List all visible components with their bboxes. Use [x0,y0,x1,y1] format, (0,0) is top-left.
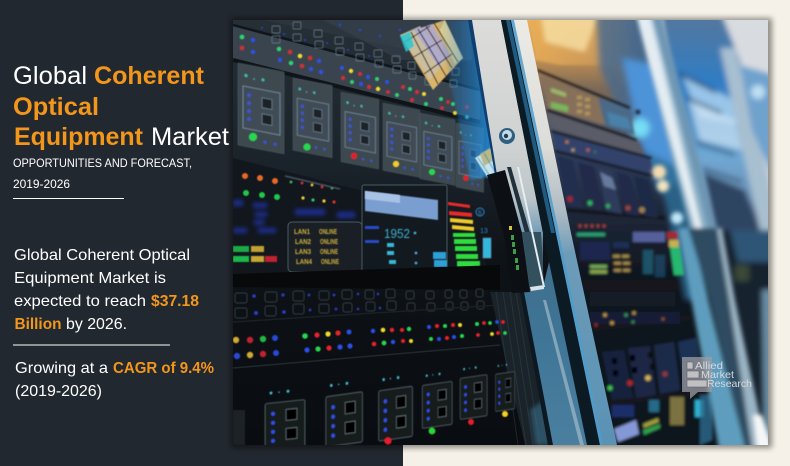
LAN status panel: LAN4 [296,259,312,266]
market size text: Global Coherent Optical [14,247,190,264]
market size text: by 2026. [66,316,127,333]
middle control zone [233,158,491,278]
CAGR text [15,360,214,400]
title [13,62,229,151]
market size text: $37.18 [151,293,199,310]
level meter bars: 6 [478,210,482,217]
logo: Allied Market Research [682,357,752,399]
LCD display: 1952 [384,226,410,241]
icon: door screw [499,128,515,144]
LCD display [362,185,447,273]
title: Market [151,123,229,151]
CAGR text: CAGR of 9.4% [113,360,214,377]
blue glow beside door [438,20,499,180]
market size text: expected to reach [14,293,146,310]
LAN status panel: LAN2 [295,239,311,246]
LAN status panel [288,222,362,272]
level meter bars [448,202,491,267]
photo: server racks [233,10,780,455]
market size text [14,247,199,333]
lower dark rows [233,265,500,368]
LAN status panel: LAN1 [294,229,310,236]
photo shadow [231,18,772,448]
CAGR text: Growing at a [15,360,108,377]
logo: Allied Market Research: Market [701,369,734,381]
market size text: Equipment Market is [14,270,166,287]
small glass reflection [475,148,498,178]
logo: Allied Market Research: Research [707,378,752,390]
server modules, lower row [233,362,515,452]
left rack top strip [233,14,480,122]
title: Coherent [94,62,205,90]
LAN status panel: ONLINE [320,249,338,256]
CAGR text: (2019-2026) [15,383,102,400]
subtitle: 2019-2026 [13,177,70,191]
subtitle: OPPORTUNITIES AND FORECAST, [13,156,192,170]
LED strip [240,35,469,119]
server modules, upper row [238,63,484,192]
door frame bars [468,20,617,445]
title: Optical [13,93,99,121]
subtitle [13,156,192,191]
LAN status panel: LAN3 [295,249,311,256]
level meter bars: 13 [480,228,488,235]
LAN status panel: ONLINE [321,259,339,266]
LED rows, lower [233,320,507,359]
reflective rack slats near door [490,292,550,445]
far right blurred rack [660,20,768,443]
door handle [487,167,545,293]
right blurred server rack [527,20,718,445]
title: Global [13,62,87,90]
glass reflection grid [400,20,463,90]
LAN status panel: ONLINE [319,229,337,236]
far right door bars [635,10,775,455]
LAN status panel: ONLINE [320,239,338,246]
logo: Allied Market Research: Allied [695,360,723,372]
left dark panel [0,0,403,466]
title: Equipment [14,123,144,151]
market size text: Billion [14,316,62,333]
